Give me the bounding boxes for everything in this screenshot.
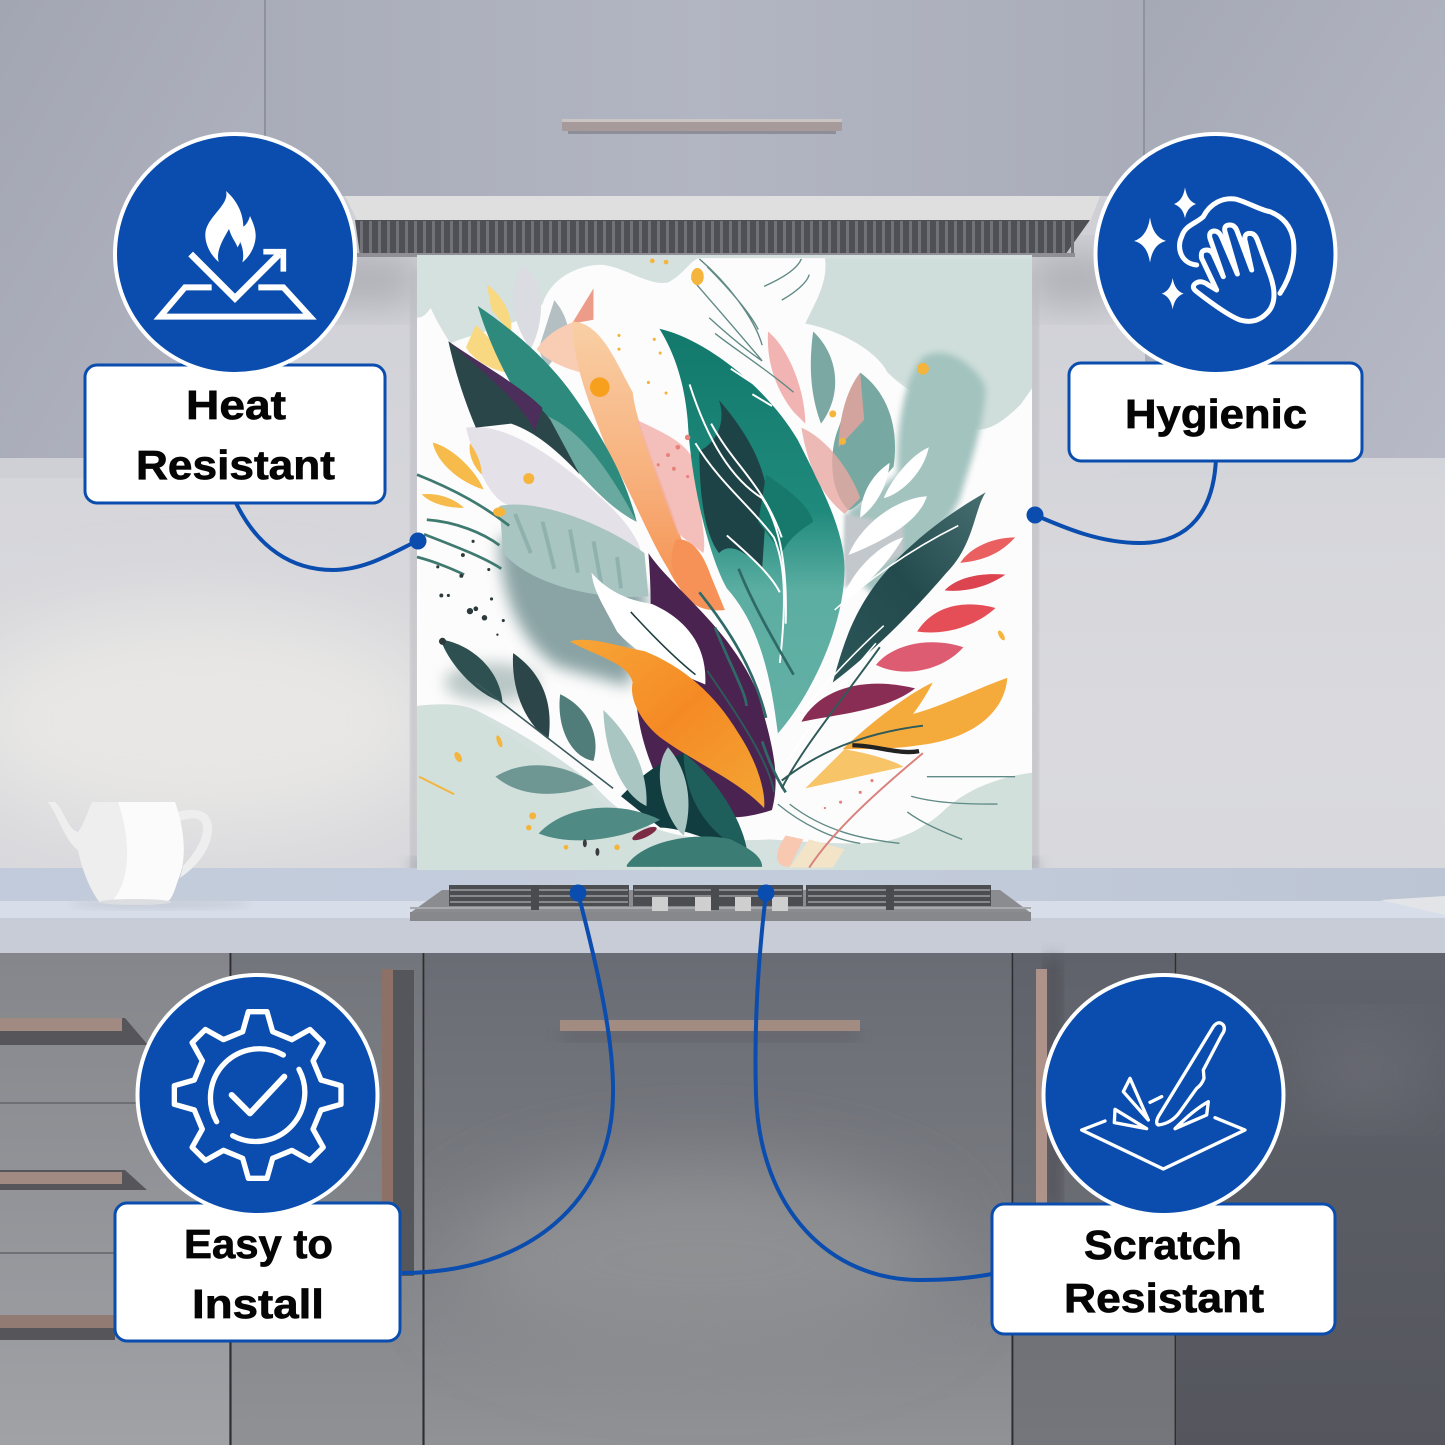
upper left cabinet shelf edge (0, 458, 262, 478)
drawer handles (0, 1018, 148, 1340)
connector: scratch resistant (755, 884, 992, 1280)
peach leaf (572, 322, 715, 608)
bottom right mint (825, 773, 1032, 870)
smoke right (845, 353, 986, 600)
icon: knife scratching surface (1082, 1023, 1245, 1169)
teapot (48, 802, 250, 909)
control knobs (652, 897, 788, 911)
label box: hygienic (1069, 363, 1362, 461)
burner grates (449, 885, 991, 906)
dark right leaf (833, 492, 986, 683)
label box: easy to install (115, 1203, 400, 1341)
lower right cabinet (1177, 953, 1445, 1445)
icon: flame over surface (160, 191, 310, 317)
dark inner leaf (699, 400, 767, 569)
teal fan leaf (499, 505, 648, 597)
callout: heat resistant (85, 134, 385, 503)
right worktop item (1380, 896, 1445, 915)
badge circle: heat (115, 134, 355, 374)
gray teal leaves (811, 331, 835, 424)
extractor vent (355, 220, 1090, 255)
badge circle: easy to install (138, 975, 378, 1215)
pale mint leaves (603, 710, 688, 835)
pink triangle (572, 288, 593, 324)
yellow orange right leaves (805, 678, 1007, 788)
lower centre cabinet (425, 953, 1011, 1445)
cabinet gaps (230, 953, 1176, 1445)
drawer lines (0, 1103, 229, 1253)
yellow accents (419, 259, 1006, 850)
teal leaf lower shade (535, 412, 637, 522)
splashback shadow (412, 860, 1037, 874)
fine fern strokes (692, 259, 1015, 843)
cabinet handle (562, 119, 842, 134)
dark left leaf (448, 341, 580, 475)
connector: hygienic (1026, 458, 1216, 543)
peach facets (537, 322, 582, 373)
label text: heat resistant: Heat (186, 382, 286, 428)
top gray facets (539, 300, 568, 369)
worktop front edge (0, 918, 1445, 953)
upper right cabinet (1145, 0, 1445, 458)
red leaves (801, 537, 1015, 722)
pale lavender leaf (513, 265, 541, 349)
bottom dark marks (631, 824, 658, 843)
yellow leaves (466, 284, 511, 373)
dark teal lower leaf (684, 753, 747, 852)
white background shape (417, 258, 1032, 843)
centre drawer handle (560, 1020, 860, 1040)
dark teal left leaves (441, 639, 762, 867)
fan ribs (515, 514, 621, 588)
icon: gear with check (174, 1012, 341, 1178)
left thin stems (417, 475, 509, 575)
vertical handle left (382, 969, 414, 1276)
teal left leaf (478, 306, 637, 522)
pink wash leaves right (801, 428, 860, 514)
bottom left mint (417, 705, 660, 870)
coral speckles (657, 435, 874, 809)
splatter haze (444, 663, 539, 702)
callout: scratch resistant (992, 975, 1335, 1334)
callout: hygienic (1069, 134, 1362, 461)
label box: scratch resistant (992, 1204, 1335, 1334)
extractor hood (345, 196, 1100, 222)
splashback artwork (417, 255, 1032, 870)
dark speckles (436, 540, 505, 645)
dark lower centre (621, 753, 747, 852)
lavender blob (466, 427, 641, 551)
dark teal strokes over purple (699, 569, 794, 792)
smoke right gray (845, 514, 903, 588)
coral stroke and bottom feather (777, 753, 923, 868)
connector: easy to install (402, 884, 613, 1273)
icon: hand wiping with sparkles (1134, 187, 1294, 321)
top right mint wash (805, 259, 1032, 428)
big teal leaf (659, 329, 845, 734)
white feather swooshes (690, 369, 786, 663)
splashback right side shadow (1032, 270, 1038, 870)
label text: heat resistant: Resistant (136, 442, 335, 488)
right top pink leaf (768, 331, 805, 424)
purple center leaf (636, 553, 776, 817)
white leaves right (843, 447, 929, 600)
upper right cabinet shelf edge (1110, 458, 1445, 478)
label text: hygienic: Hygienic (1125, 391, 1307, 437)
label box: heat resistant (85, 365, 385, 503)
yellow small left leaves (422, 442, 484, 508)
callout: easy to install (115, 975, 400, 1341)
lower fourth cabinet (1014, 953, 1174, 1445)
orange feather lower (672, 539, 725, 610)
worktop rear surface (0, 868, 1445, 901)
label text: easy to install: Install (192, 1281, 324, 1327)
pink watercolor wash (637, 420, 704, 553)
smoke left (499, 536, 648, 686)
badge circle: scratch resistant (1044, 975, 1284, 1215)
hood shadow (345, 253, 1075, 257)
lower left cabinet (0, 953, 229, 1445)
label text: easy to install: Easy to (184, 1221, 333, 1267)
vertical handle right (1036, 960, 1060, 1210)
orange circle (590, 377, 610, 397)
label text: scratch resistant: Scratch (1084, 1222, 1242, 1268)
upper left cabinet (0, 0, 264, 458)
upper cabinet gap right (1141, 0, 1147, 196)
splashback side shadows (411, 270, 417, 870)
badge circle: hygienic (1096, 134, 1336, 374)
worktop top surface (0, 901, 1445, 918)
cooktop (410, 885, 1031, 921)
label text: scratch resistant: Resistant (1064, 1275, 1264, 1321)
dark stem fan (707, 647, 923, 792)
purple streak (448, 341, 543, 431)
upper cabinet gaps (262, 0, 268, 196)
upper centre cabinet (266, 0, 1143, 196)
orange leaf (570, 640, 764, 808)
art base (417, 255, 1032, 870)
mid teal shape (758, 475, 813, 553)
white leaf (592, 573, 705, 684)
lower second cabinet (232, 953, 422, 1445)
connector: heat resistant (236, 503, 426, 570)
